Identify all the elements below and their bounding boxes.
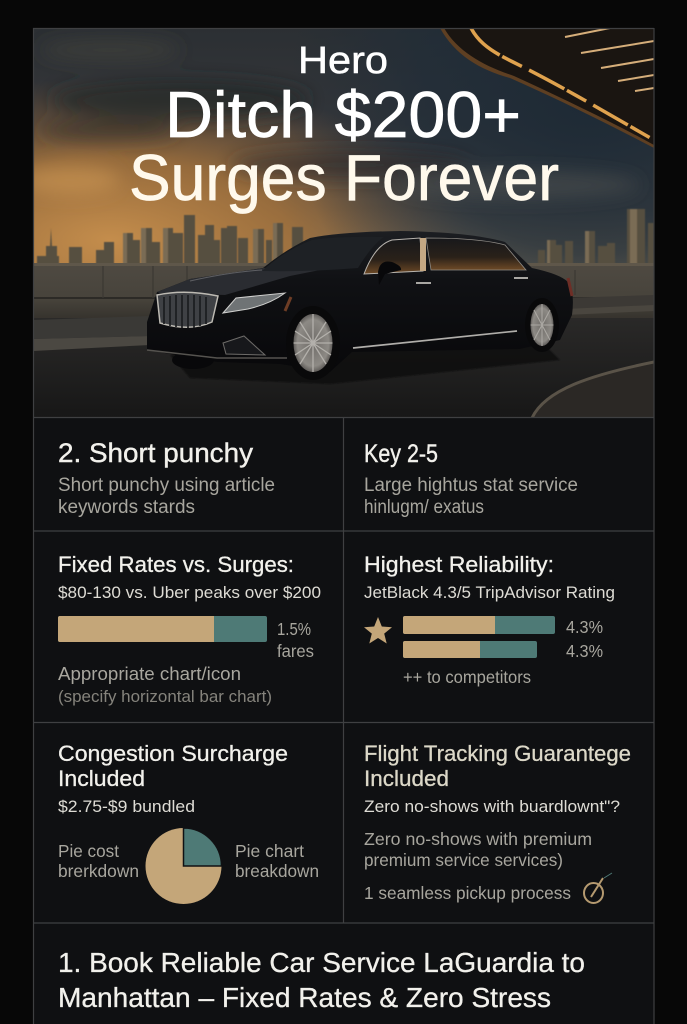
heading: Included: [58, 766, 145, 791]
panel: hero: [20, 28, 654, 418]
rating values: [566, 617, 603, 661]
subheading: $2.75-$9 bundled: [58, 798, 195, 816]
heading: [364, 741, 631, 791]
left pie label: brerkdown: [58, 861, 139, 881]
panel: fixed rates: [58, 552, 321, 706]
pie chart: [146, 828, 222, 904]
chart note: [58, 663, 272, 706]
bar value label: fares: [277, 641, 314, 661]
panel: short punchy: [58, 438, 275, 518]
horizontal bar chart: [58, 616, 267, 642]
panel: congestion surcharge: [58, 741, 319, 904]
heading: Fixed Rates vs. Surges:: [58, 552, 294, 577]
panel: key stats: [364, 440, 578, 518]
body text: premium service services): [364, 850, 563, 870]
subheading: Zero no-shows with buardlownt"?: [364, 798, 620, 816]
right pie label: Pie chart: [235, 841, 304, 861]
heading: 2. Short punchy: [58, 438, 254, 468]
rating bar 1: [403, 616, 555, 634]
body text: keywords stards: [58, 497, 195, 518]
footer title: 1. Book Reliable Car Service LaGuardia to: [58, 947, 585, 978]
left pie label: Pie cost: [58, 841, 119, 861]
city skyline: [37, 209, 654, 269]
left pie label: [58, 841, 139, 881]
hero sky: [20, 28, 654, 268]
comparison note: ++ to competitors: [403, 667, 531, 687]
bar value label: [277, 619, 314, 661]
road and kerbs: [33, 295, 654, 418]
body text: hinlugm/ exatus: [364, 497, 484, 518]
heading: Congestion Surcharge: [58, 741, 288, 766]
body text: Large hightus stat service: [364, 475, 578, 496]
panel: flight tracking: [364, 741, 631, 903]
body text: Zero no-shows with premium: [364, 829, 592, 849]
rating values: 4.3%: [566, 617, 603, 637]
limousine: [147, 231, 573, 384]
rating bar 2: [403, 641, 537, 658]
right pie label: breakdown: [235, 861, 319, 881]
footer title: [58, 947, 585, 1013]
chart note: Appropriate chart/icon: [58, 663, 241, 684]
chart note: (specify horizontal bar chart): [58, 687, 272, 706]
body text: [364, 829, 592, 870]
subheading: $80-130 vs. Uber peaks over $200: [58, 584, 321, 602]
bar value label: 1.5%: [277, 619, 311, 639]
pickup note: 1 seamless pickup process: [364, 883, 571, 903]
hero headline line 1: Ditch $200+: [165, 78, 521, 151]
heading: Highest Reliability:: [364, 552, 554, 577]
icon: star: [364, 617, 392, 644]
heading: [58, 741, 288, 791]
body text: [58, 475, 275, 518]
heading: Flight Tracking Guarantege: [364, 741, 631, 766]
body text: [364, 475, 578, 518]
hero headline line 2: Surges Forever: [129, 141, 559, 214]
right pie label: [235, 841, 319, 881]
subheading: JetBlack 4.3/5 TripAdvisor Rating: [364, 584, 615, 602]
heading: Included: [364, 766, 449, 791]
concrete wall: [33, 263, 654, 323]
body text: Short punchy using article: [58, 475, 275, 496]
icon: target: [584, 873, 612, 903]
footer title: Manhattan – Fixed Rates & Zero Stress: [58, 982, 551, 1013]
rating values: 4.3%: [566, 641, 603, 661]
panel: highest reliability: [364, 552, 615, 687]
canopy overhang: [440, 28, 654, 148]
hero eyebrow: Hero: [298, 40, 388, 82]
heading: Key 2-5: [364, 440, 438, 468]
